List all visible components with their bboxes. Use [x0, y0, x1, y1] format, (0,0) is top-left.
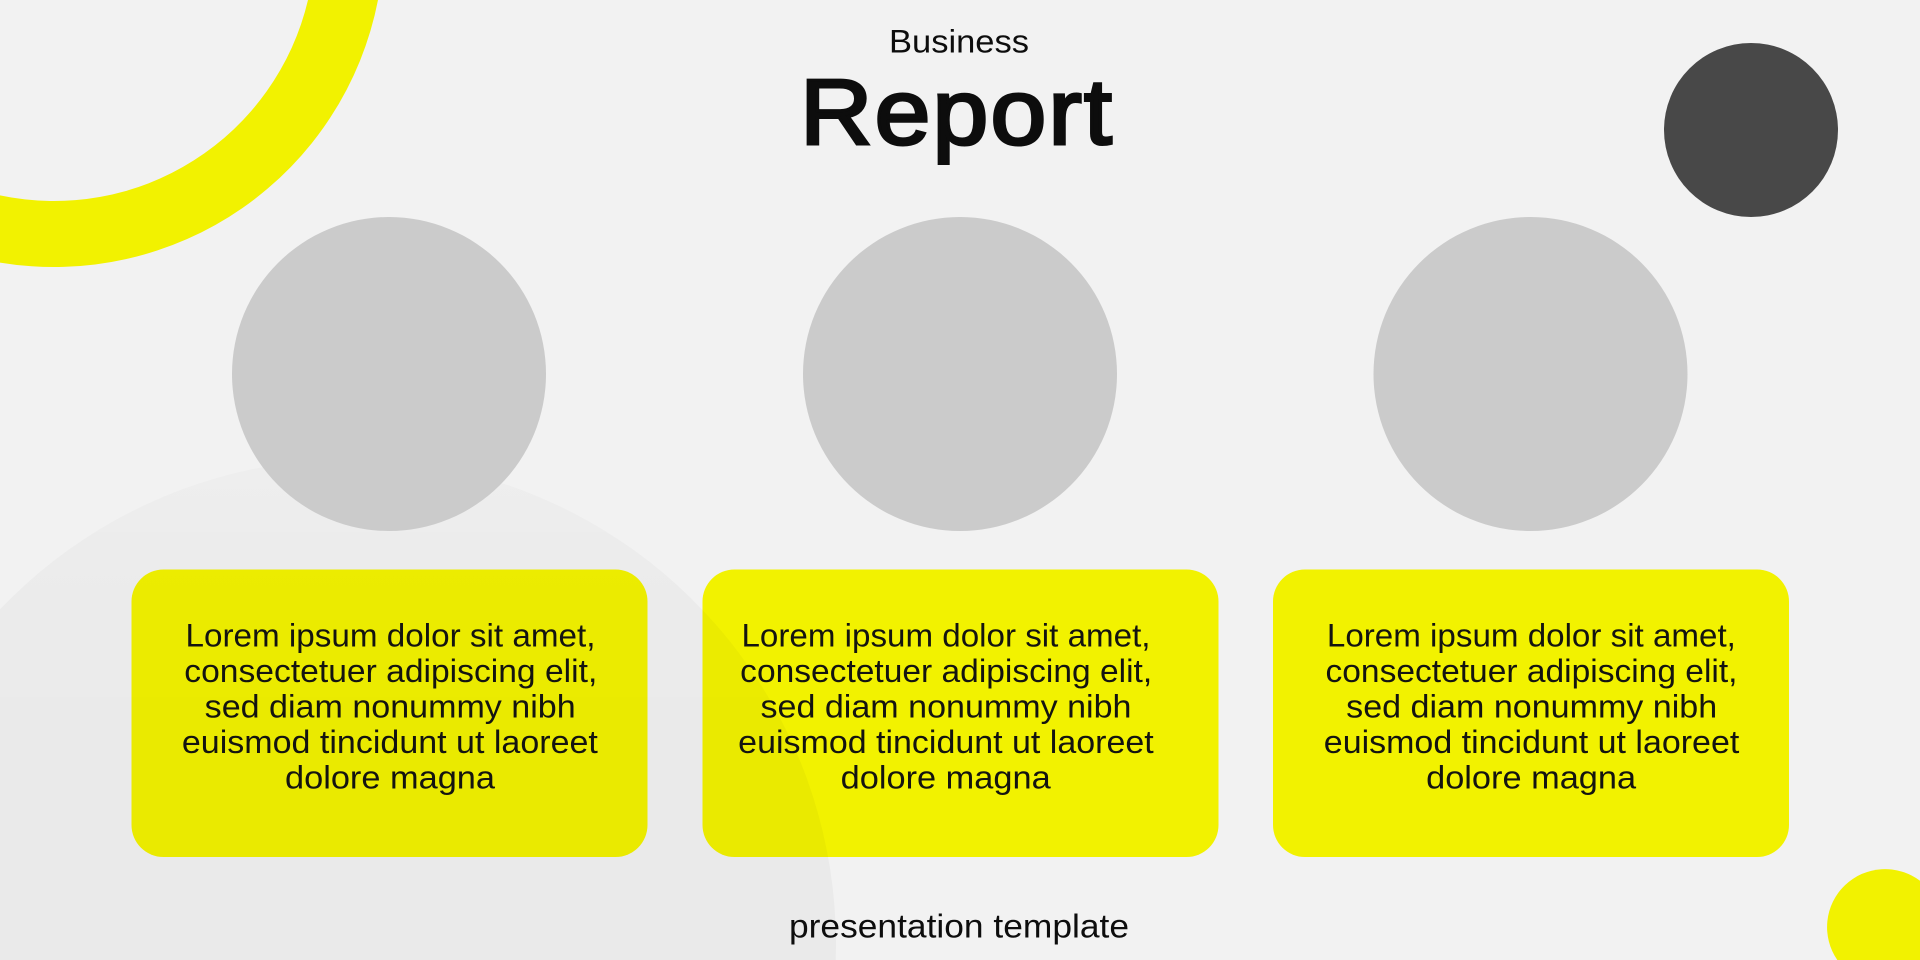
decorative yellow ring, top left — [0, 0, 378, 267]
placeholder circle 2 — [803, 217, 1117, 531]
subtitle: Business — [889, 24, 1029, 60]
card 2 text: consectetuer adipiscing elit, — [740, 653, 1152, 689]
card 2 text: euismod tincidunt ut laoreet — [738, 724, 1154, 760]
large translucent background circle — [0, 459, 836, 960]
title: Report — [800, 60, 1114, 164]
image placeholder circles — [232, 217, 1688, 531]
card 2 text — [738, 618, 1154, 795]
card 1 text: consectetuer adipiscing elit, — [184, 653, 597, 689]
card 1 text: Lorem ipsum dolor sit amet, — [186, 618, 596, 654]
card 1 background — [132, 570, 648, 857]
card 2 text: sed diam nonummy nibh — [760, 688, 1132, 724]
placeholder circle 3 — [1374, 217, 1688, 531]
yellow circle, bottom right — [1827, 869, 1920, 960]
card 2 background — [702, 570, 1218, 857]
card 1 text: sed diam nonummy nibh — [205, 688, 576, 724]
card 3 text: dolore magna — [1426, 759, 1637, 795]
card 3 text: sed diam nonummy nibh — [1346, 688, 1717, 724]
card 2 text: dolore magna — [841, 759, 1052, 795]
card 3 text: euismod tincidunt ut laoreet — [1324, 724, 1739, 760]
card 1 text — [182, 618, 598, 795]
card 3 text — [1324, 618, 1739, 795]
card 1 text: dolore magna — [285, 759, 496, 795]
card 3 text: consectetuer adipiscing elit, — [1326, 653, 1738, 689]
card 1 text: euismod tincidunt ut laoreet — [182, 724, 598, 760]
yellow card backgrounds — [132, 570, 1789, 857]
card 2 text: Lorem ipsum dolor sit amet, — [742, 618, 1150, 654]
dark circle, top right — [1664, 43, 1838, 217]
card 3 text: Lorem ipsum dolor sit amet, — [1327, 618, 1736, 654]
footer text: presentation template — [789, 907, 1129, 944]
card 3 background — [1273, 570, 1789, 857]
placeholder circle 1 — [232, 217, 546, 531]
